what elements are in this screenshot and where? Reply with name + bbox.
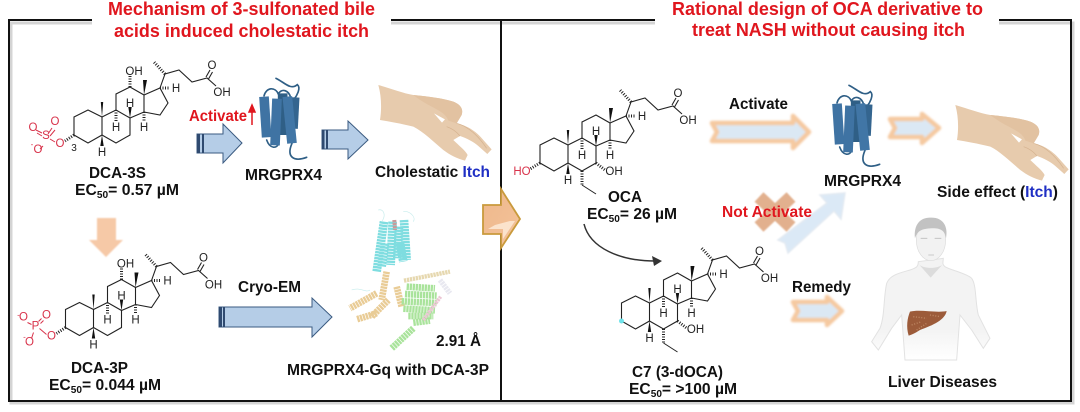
arrow: receptor to side effect xyxy=(890,114,939,143)
label: C7 (3-dOCA): C7 (3-dOCA) xyxy=(632,364,723,381)
molecule: DCA-3S: O xyxy=(29,122,38,134)
icon: MRGPRX4 receptor xyxy=(264,78,307,159)
molecule: OCA: H xyxy=(564,175,572,187)
structure: MRGPRX4-Gq cryo-EM model xyxy=(350,210,450,348)
label: C7 (3-dOCA): = >100 µM xyxy=(662,381,737,398)
label: DCA-3P xyxy=(49,360,161,396)
icon: scratching hand (right) xyxy=(955,105,1069,181)
molecule: C7 (3-dOCA): H xyxy=(645,333,654,345)
molecule: DCA-3S: O xyxy=(56,138,65,150)
label: DCA-3S: = 0.57 µM xyxy=(108,182,179,199)
molecule: DCA-3P: H xyxy=(163,276,172,288)
molecule: DCA-3S: H xyxy=(126,98,134,110)
molecule: DCA-3S: O xyxy=(34,144,43,156)
molecule: DCA-3P: OH xyxy=(117,258,134,270)
label: Side effect (Itch): Side effect (Itch) xyxy=(937,184,1058,201)
label: C7 (3-dOCA): EC xyxy=(629,381,651,398)
label: DCA-3P: DCA-3P xyxy=(71,360,128,377)
molecule: DCA-3S: O xyxy=(208,60,217,72)
molecule: DCA-3P: O xyxy=(42,310,51,322)
molecule: C7 (3-dOCA): H xyxy=(687,308,696,320)
molecule: OCA: OH xyxy=(605,166,623,178)
molecule: C7 (3-dOCA) xyxy=(619,246,778,352)
molecule: DCA-3P: OH xyxy=(205,280,222,292)
molecule: DCA-3S: H xyxy=(98,147,106,159)
label: MRGPRX4 (right): MRGPRX4 xyxy=(824,173,901,190)
arrow: Cryo-EM xyxy=(219,298,332,337)
label: MRGPRX4: MRGPRX4 xyxy=(245,167,322,184)
label: DCA-3P: EC xyxy=(49,377,71,394)
molecule: DCA-3P: H xyxy=(131,314,140,326)
molecule: DCA-3S: - xyxy=(31,140,34,149)
molecule: DCA-3P: P xyxy=(32,320,40,332)
arrow: DCA-3S to MRGPRX4 xyxy=(197,124,242,163)
label: DCA-3S: EC xyxy=(75,182,97,199)
label: DCA-3S: 50 xyxy=(97,190,109,201)
molecule: DCA-3P: H xyxy=(89,340,98,352)
icon: human body with liver xyxy=(872,218,990,360)
label: Activate with red up arrow: Activate xyxy=(189,108,247,125)
label: OCA xyxy=(587,189,677,225)
molecule: C7 (3-dOCA): H xyxy=(673,284,682,296)
molecule: DCA-3P: - xyxy=(17,310,20,320)
label: resolution: 2.91 Å xyxy=(436,333,481,350)
label: OCA: 50 xyxy=(609,214,620,225)
molecule: DCA-3S: OH xyxy=(213,87,231,99)
label: Activate (black): Activate xyxy=(729,96,788,113)
title: right panel xyxy=(672,0,983,40)
molecule: OCA: OH xyxy=(679,115,697,127)
title: right panel: treat NASH without causing itch xyxy=(692,20,965,40)
label: Not Activate: Not Activate xyxy=(722,204,812,221)
molecule: OCA xyxy=(513,88,697,194)
arrow: curved OCA to C7 xyxy=(584,224,662,266)
molecule: DCA-3P: H xyxy=(103,314,112,326)
molecule: OCA: H xyxy=(578,150,586,162)
arrow: diagonal not activating xyxy=(778,193,845,253)
molecule: OCA: HO xyxy=(513,166,531,178)
molecule: C7 (3-dOCA): H xyxy=(659,308,668,320)
molecule: DCA-3P: O xyxy=(19,312,28,324)
molecule: DCA-3P: O xyxy=(47,330,56,342)
molecule: DCA-3P: O xyxy=(199,252,208,264)
molecule: OCA: H xyxy=(606,150,614,162)
arrow: central transition xyxy=(483,189,520,248)
molecule: DCA-3S: OH xyxy=(125,66,143,78)
molecule: DCA-3P xyxy=(17,252,222,352)
molecule: DCA-3S: H xyxy=(140,122,148,134)
label: DCA-3P: 50 xyxy=(71,385,82,396)
label: OCA: OCA xyxy=(608,189,642,206)
icon: scratching hand xyxy=(378,85,492,161)
arrow: DCA-3S to DCA-3P xyxy=(89,218,123,257)
molecule: DCA-3S: H xyxy=(112,122,120,134)
arrow: OCA activates receptor xyxy=(712,116,809,148)
molecule: DCA-3S: H xyxy=(172,83,180,95)
icon: cross xyxy=(759,197,791,227)
arrow: MRGPRX4 to itch xyxy=(322,121,368,159)
molecule: C7 (3-dOCA): OH xyxy=(761,273,778,285)
molecule: DCA-3S: S xyxy=(42,130,50,142)
molecule: C7 (3-dOCA): H xyxy=(719,269,728,281)
label: C7 (3-dOCA) xyxy=(629,364,737,400)
molecule: OCA: H xyxy=(638,111,646,123)
label: Cryo-EM: Cryo-EM xyxy=(238,279,301,296)
label: Liver Diseases: Liver Diseases xyxy=(888,374,997,391)
molecule: DCA-3S xyxy=(29,60,231,159)
molecule: C7 (3-dOCA): OH xyxy=(687,324,704,336)
label: DCA-3P: = 0.044 µM xyxy=(82,377,161,394)
molecule: OCA: H xyxy=(592,126,600,138)
label: OCA: = 26 µM xyxy=(620,206,677,223)
molecule: DCA-3S: O xyxy=(51,116,60,128)
molecule: DCA-3P: H xyxy=(117,290,126,302)
molecule: OCA: O xyxy=(674,88,683,100)
label: C7 (3-dOCA): 50 xyxy=(651,389,662,400)
arrow: Remedy xyxy=(793,297,842,325)
molecule: DCA-3S: 3 xyxy=(71,143,77,154)
icon: MRGPRX4 receptor (right) xyxy=(837,85,880,166)
molecule: DCA-3P: O xyxy=(25,336,34,348)
label: DCA-3S: DCA-3S xyxy=(89,165,146,182)
label: Remedy: Remedy xyxy=(792,279,851,296)
title: left panel: acids induced cholestatic itch xyxy=(114,21,369,41)
title: left panel xyxy=(108,0,375,41)
label: MRGPRX4-Gq with DCA-3P: MRGPRX4-Gq with DCA-3P xyxy=(287,362,489,379)
label: DCA-3S xyxy=(75,165,179,201)
label: OCA: EC xyxy=(587,206,609,223)
molecule: C7 (3-dOCA): O xyxy=(755,246,764,258)
label: Cholestatic Itch: Cholestatic Itch xyxy=(375,164,490,181)
molecule: DCA-3P: - xyxy=(23,332,26,342)
